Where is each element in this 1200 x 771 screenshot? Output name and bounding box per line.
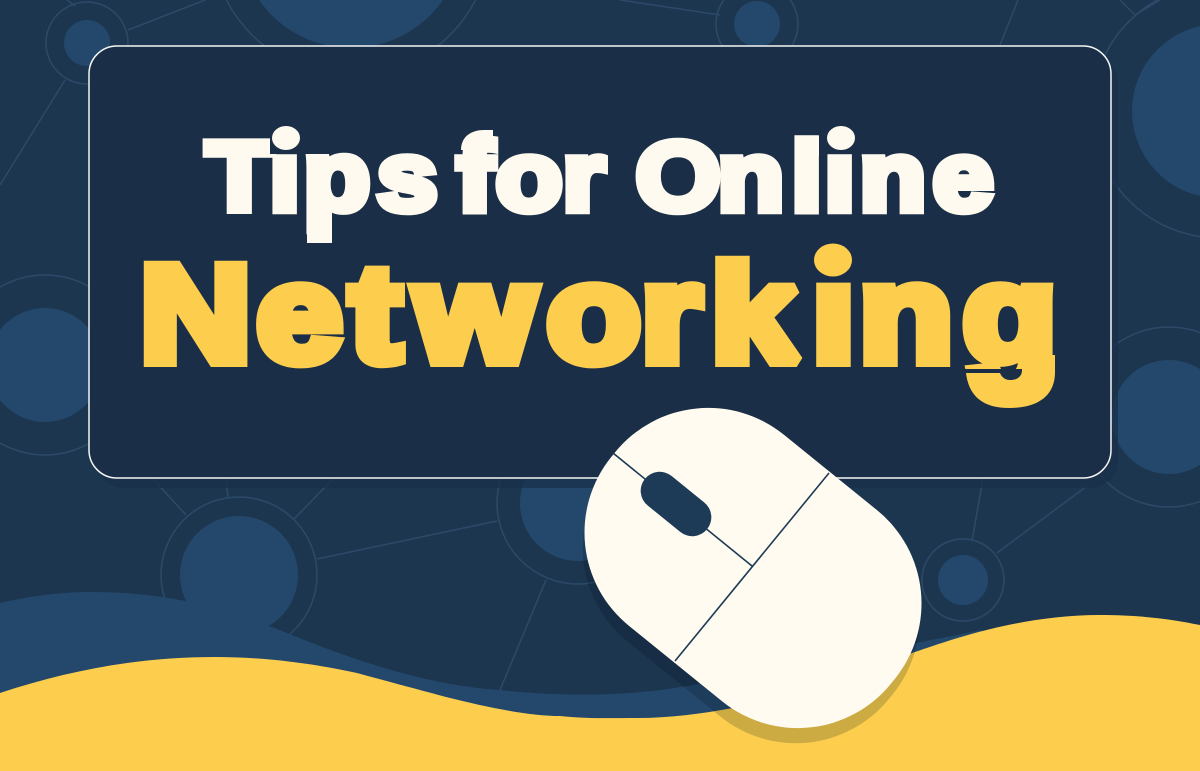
mouse body (536, 359, 970, 771)
letterform refinements: line 2 (811, 238, 1062, 408)
blue wave (0, 592, 1200, 771)
letterform refinements: line 1 (270, 120, 858, 243)
scroll wheel (633, 464, 719, 544)
yellow wave (0, 615, 1200, 771)
button divider lines (613, 453, 829, 661)
panel shadow (96, 56, 1118, 488)
title line 1: Tips for Online (206, 122, 993, 231)
title (140, 120, 1062, 408)
title panel (89, 46, 1111, 478)
title line 2: Networking (140, 237, 1057, 390)
mouse shadow (534, 374, 968, 771)
computer mouse icon (534, 359, 970, 771)
